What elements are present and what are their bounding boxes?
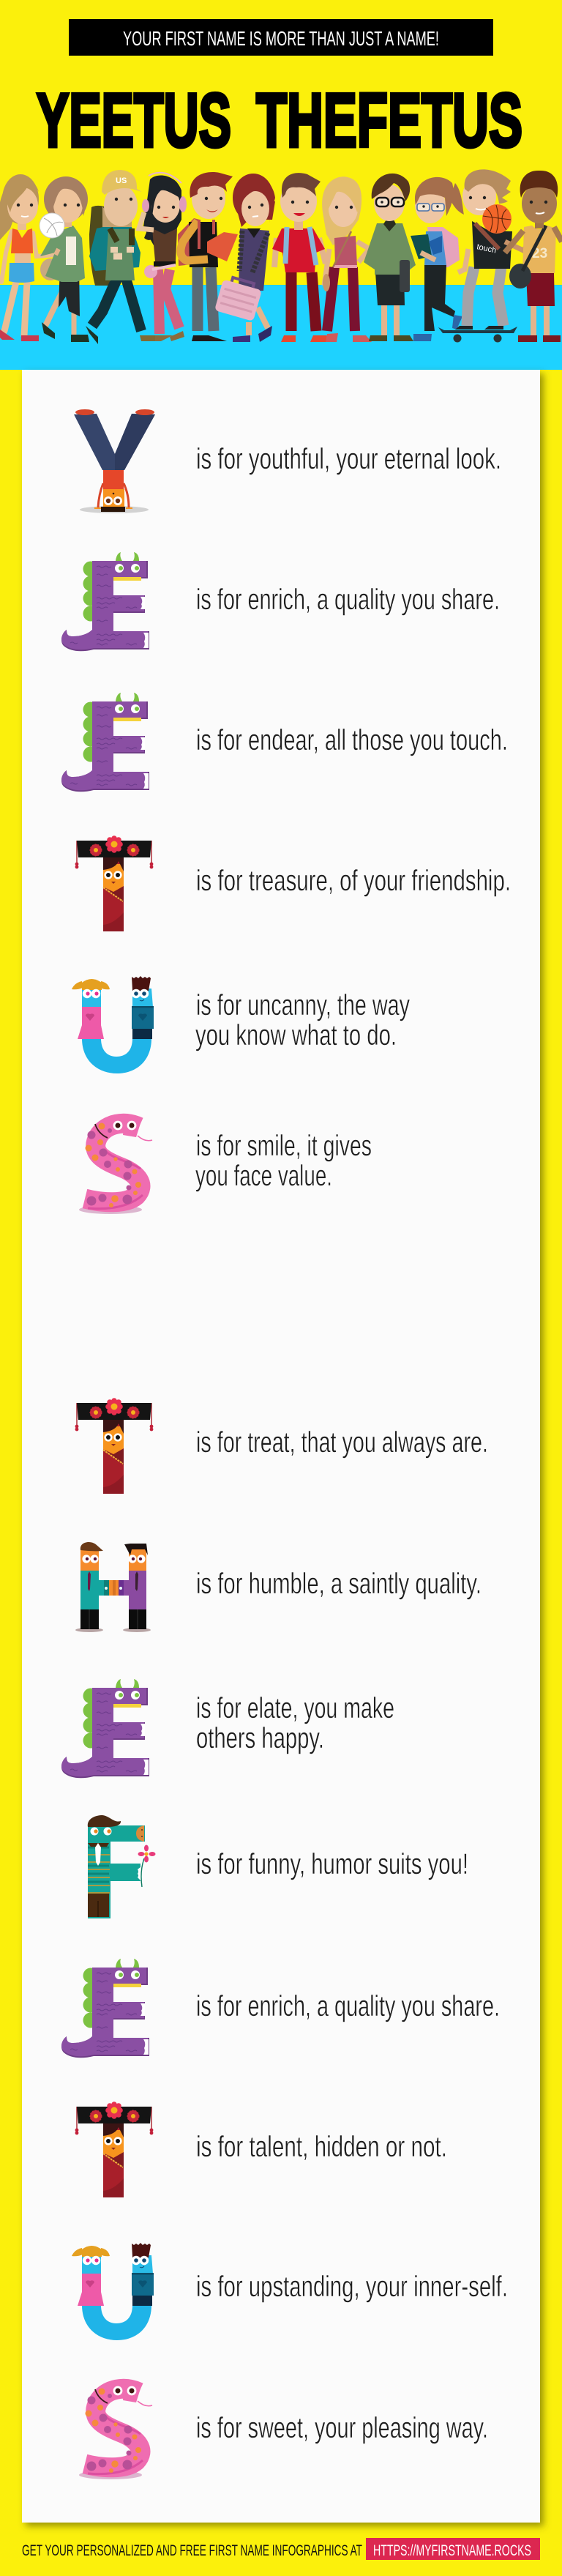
- text: smile: [195, 1130, 372, 1192]
- person 10: girl with ponytail and tablet: [411, 177, 464, 341]
- row: letter U, upstanding: [72, 2243, 508, 2340]
- row: letter H, humble: [75, 1542, 482, 1632]
- text: uncanny: you know what to do.: [195, 1019, 397, 1051]
- row: letter E, elate: [61, 1679, 394, 1778]
- person 3: boy with cap and backpack: US: [116, 176, 127, 185]
- icon: U couple: [72, 976, 154, 1073]
- illustration: group of students: [0, 169, 562, 344]
- person 11: boy on skateboard with basketball: touch: [476, 242, 497, 256]
- icon: E dragon: [61, 1959, 149, 2058]
- icon: T empress: [75, 2102, 153, 2197]
- icon: S snake: [79, 1119, 152, 1214]
- person 3: boy with cap and backpack: [86, 170, 161, 344]
- text: funny: is for funny, humor suits you!: [196, 1848, 468, 1880]
- row: letter S, sweet: [79, 2384, 488, 2479]
- icon: E dragon: [61, 1679, 149, 1778]
- row: letter F, funny: [88, 1815, 468, 1918]
- icon: T empress: [75, 835, 153, 931]
- icon: T empress: [75, 1398, 153, 1494]
- text: elate: is for elate, you make: [196, 1692, 394, 1724]
- person 1: girl in orange top: [0, 174, 56, 341]
- row: letter E, endear: [61, 693, 508, 792]
- person 8: blonde girl: [322, 176, 372, 342]
- header: tagline bar: [69, 19, 493, 56]
- text: uncanny: [195, 989, 410, 1051]
- icon: H two men shaking hands: [75, 1542, 151, 1632]
- person 12: curly-haired boy in jersey: [505, 171, 562, 342]
- text: uncanny: is for uncanny, the way: [196, 989, 410, 1021]
- row: letter S, smile: [79, 1119, 372, 1214]
- icon: E dragon: [61, 693, 149, 792]
- row: letter T, treat: [75, 1398, 488, 1494]
- icon: Y handstand character: [74, 409, 155, 513]
- blue floor band: [0, 285, 562, 370]
- footer: [22, 2538, 540, 2560]
- person 7: boy in red t-shirt: [272, 173, 332, 342]
- title: YEETUS: [37, 78, 231, 163]
- row: letter T, talent: [75, 2102, 447, 2197]
- row: letter U, uncanny: [72, 976, 410, 1073]
- text: elate: [196, 1692, 394, 1754]
- row: letter E, enrich second: [61, 1959, 500, 2058]
- person 9: boy with glasses: [364, 174, 416, 341]
- text: talent: is for talent, hidden or not.: [196, 2131, 447, 2163]
- person 12: curly-haired boy in jersey: 23: [532, 246, 547, 261]
- footer call to action text: GET YOUR PERSONALIZED AND FREE FIRST NAME INFOGRAPHICS AT: [22, 2542, 362, 2559]
- text: smile: is for smile, it gives: [196, 1130, 372, 1162]
- footer url badge: [366, 2538, 540, 2560]
- text: elate: others happy.: [196, 1722, 324, 1754]
- title: [37, 78, 522, 163]
- row: letter Y: [74, 409, 501, 513]
- text: smile: you face value.: [195, 1160, 332, 1192]
- person 2: girl with volleyball: [40, 176, 89, 342]
- icon: E dragon: [61, 552, 149, 651]
- row: letter E, enrich: [61, 552, 500, 651]
- icon: F man with flower: [88, 1815, 155, 1918]
- person 5: boy with book and backpack: [178, 172, 238, 341]
- icon: U couple: [72, 2243, 154, 2340]
- person 11: boy on skateboard with basketball: [438, 169, 534, 343]
- person 4: girl with headphones: [139, 173, 187, 341]
- person 6: girl with pink bag: [214, 174, 275, 342]
- main white panel: [22, 370, 540, 2523]
- icon: S snake: [79, 2384, 152, 2479]
- row: letter T, treasure: [75, 835, 511, 931]
